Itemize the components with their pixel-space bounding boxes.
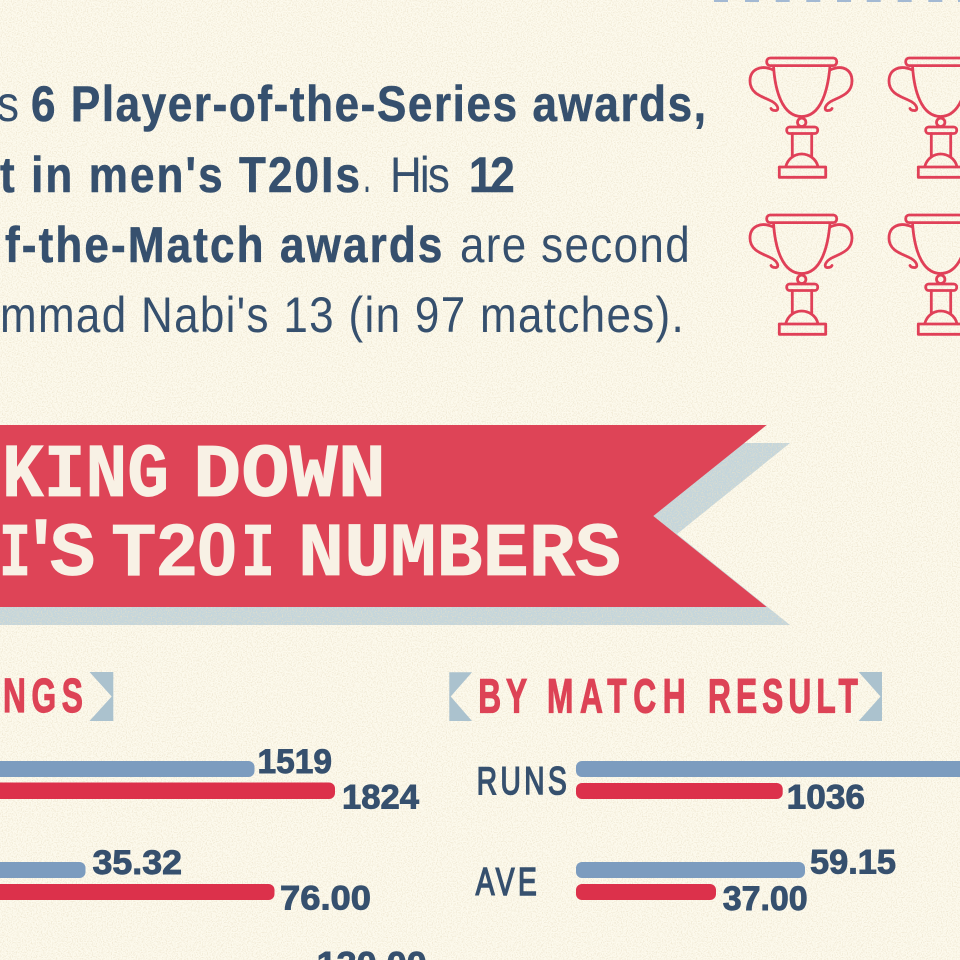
banner heading: [0, 425, 767, 607]
text block: awards paragraph: 6 Player-of-the-Series awards,: [31, 75, 706, 132]
section heading: NGS: [3, 668, 83, 723]
average bars: 35.32: [92, 844, 182, 882]
section heading: [478, 669, 858, 723]
runs bars: 1519: [258, 743, 332, 781]
icon: trophy row 1 left: [750, 58, 852, 177]
text block: awards paragraph: t in men's T20Is: [0, 146, 360, 203]
banner title: ': [18, 512, 64, 598]
icon grid: trophies: [750, 58, 960, 334]
banner ribbon: [0, 425, 767, 607]
icon: trophy row 2 right: [889, 215, 960, 334]
text block: awards paragraph: are second: [460, 216, 690, 273]
text block: awards paragraph: 12: [469, 146, 515, 203]
banner title: NUMBERS: [298, 512, 621, 598]
text block: awards paragraph: f-the-Match awards: [5, 216, 442, 273]
banner shadow: [0, 443, 790, 625]
heading bracket left: [449, 672, 472, 721]
banner title: DOWN: [193, 433, 386, 519]
text block: awards paragraph: His: [390, 146, 450, 203]
text block: awards paragraph: [0, 75, 706, 343]
average bars: [0, 844, 371, 918]
banner title: I: [0, 512, 31, 598]
banner title: T: [111, 512, 157, 598]
section heading: MATCH: [547, 669, 686, 723]
text block: awards paragraph: .: [363, 147, 371, 203]
heading bracket right: [90, 672, 113, 721]
row labels: [476, 760, 567, 904]
icon: trophy row 1 right: [889, 58, 960, 177]
average bars: [576, 844, 896, 918]
top dashed divider: [714, 0, 960, 2]
heading bracket right: [859, 672, 882, 721]
banner title: S: [50, 512, 95, 598]
row labels: RUNS: [477, 760, 567, 803]
icon: trophy row 2 left: [750, 215, 852, 334]
section heading: RESULT: [708, 669, 858, 723]
banner title: I: [241, 512, 275, 598]
banner title: [0, 433, 621, 598]
runs bars: 1824: [342, 778, 419, 816]
average bars: 59.15: [810, 844, 896, 882]
runs bars: [576, 761, 960, 816]
runs bars: [0, 743, 419, 816]
panel: left stats, cropped heading and bars: [0, 668, 427, 960]
text block: awards paragraph: mmad Nabi's 13 (in 97 matches).: [0, 286, 684, 343]
banner title: KING: [2, 433, 169, 519]
section heading: BY: [478, 669, 527, 723]
average bars: 76.00: [280, 880, 371, 918]
average bars: 37.00: [723, 880, 808, 918]
runs bars: 1036: [787, 778, 865, 816]
row labels: AVE: [476, 861, 537, 904]
banner title: 20: [157, 510, 237, 591]
panel: by match result: [449, 669, 960, 918]
